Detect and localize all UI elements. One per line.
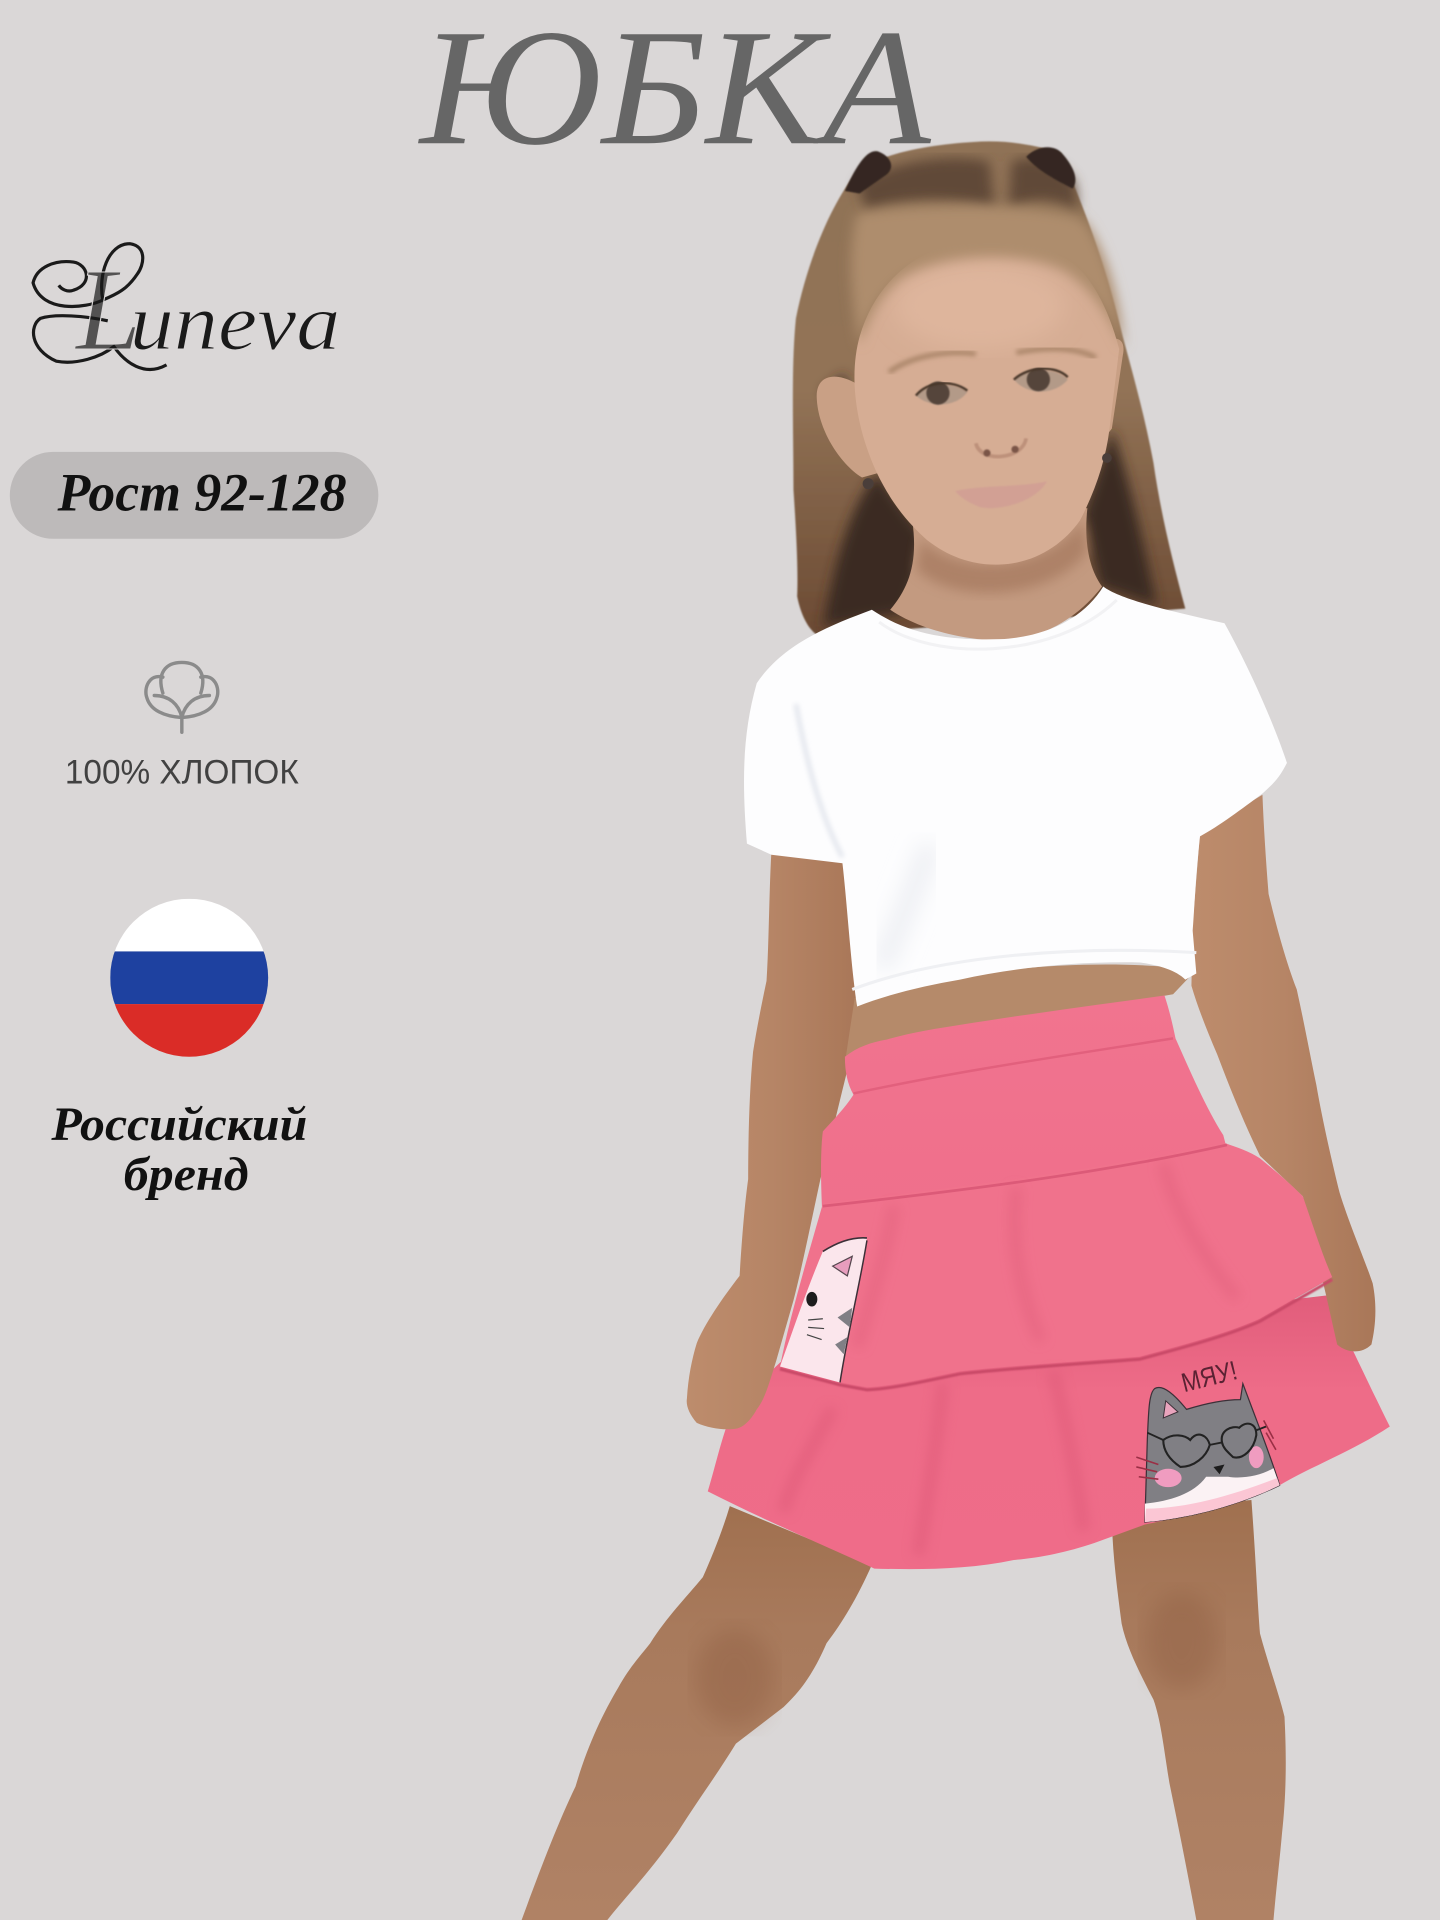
right arm and hand: [1191, 795, 1375, 1351]
pink skirt: [780, 996, 1332, 1555]
nose: [976, 438, 1026, 457]
brand logo: [33, 244, 340, 375]
waistband and yoke: [821, 996, 1231, 1224]
fringe hair: [851, 206, 1124, 349]
neck: [890, 508, 1102, 640]
eyes and brows: [889, 349, 1096, 405]
hair buns: [845, 147, 1075, 193]
ears: [817, 339, 1124, 478]
hair shadows: [823, 373, 1157, 627]
height badge: Рост 92-128: [57, 463, 347, 523]
hair: [793, 141, 1185, 636]
skirt lower tier: [708, 1296, 1390, 1569]
hair parting: [996, 162, 1000, 235]
print caption: МЯУ!: [1178, 1355, 1240, 1398]
grey cat print: [1136, 1384, 1280, 1522]
icon: russian flag: [110, 899, 269, 1058]
white cat print: [780, 1238, 867, 1382]
height badge: [10, 452, 378, 539]
left arm and hand: [687, 851, 857, 1429]
earrings: [863, 453, 1112, 489]
face: [854, 240, 1119, 565]
face highlight: [894, 263, 1065, 349]
brand origin text: [50, 1098, 307, 1201]
material label: 100% ХЛОПОК: [65, 754, 299, 792]
child photo illustration: [522, 141, 1390, 1920]
white t-shirt: [744, 587, 1287, 1007]
brand origin text: бренд: [124, 1148, 249, 1201]
skirt seams and folds: [780, 1038, 1332, 1555]
midriff: [845, 965, 1196, 1063]
mouth: [955, 481, 1047, 508]
title: ЮБКА: [418, 0, 932, 180]
brand origin text: Российский: [50, 1098, 307, 1151]
brand logo: uneva: [130, 278, 340, 367]
top hair band: [857, 158, 1078, 211]
upper tier: [780, 1142, 1332, 1387]
brand logo: L: [74, 245, 141, 375]
chin shadow: [916, 520, 1087, 593]
icon: cotton: [146, 662, 218, 732]
legs: [522, 1500, 1286, 1920]
